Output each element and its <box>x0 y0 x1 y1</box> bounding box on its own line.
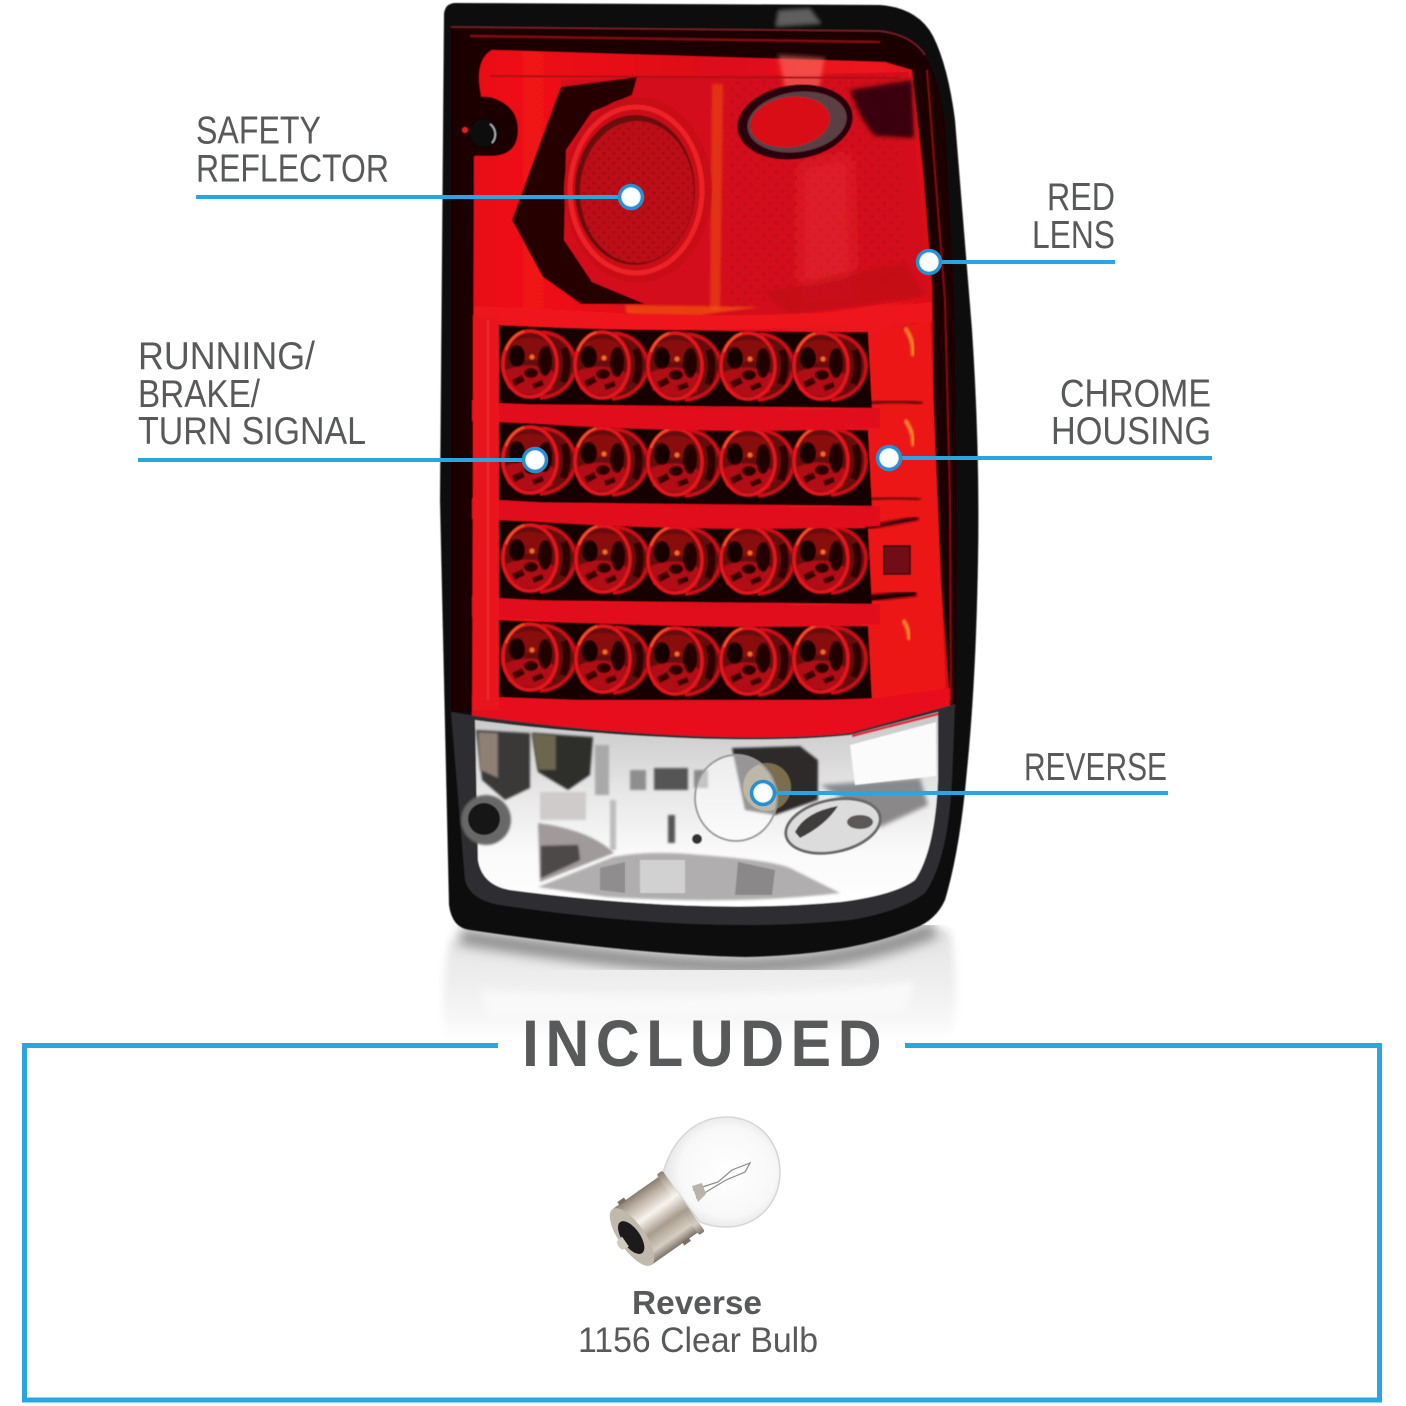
product reflection <box>443 929 956 1040</box>
callout: running brake turn signal: TURN SIGNAL <box>138 410 366 453</box>
side marker square <box>884 546 910 574</box>
red trim line <box>852 714 938 736</box>
callout: red lens <box>918 176 1115 274</box>
tail light assembly <box>440 3 978 957</box>
clear reverse section <box>451 704 955 925</box>
callout: red lens: LENS <box>1032 214 1115 257</box>
lower mounting screw <box>461 795 511 845</box>
panel heading: INCLUDED <box>522 1006 888 1080</box>
centre chrome reflectors <box>540 745 708 850</box>
reverse bulb <box>695 755 777 841</box>
top gloss highlight <box>775 8 822 27</box>
callout: safety reflector: REFLECTOR <box>196 148 389 190</box>
right chrome band <box>820 778 928 827</box>
callout: reverse: REVERSE <box>1024 746 1167 789</box>
callout: chrome housing: HOUSING <box>1051 410 1211 453</box>
upper reflector panel <box>561 72 928 315</box>
red lens <box>462 50 950 740</box>
callout: chrome housing: CHROME <box>1060 372 1211 416</box>
upper oval lens recess <box>732 77 914 167</box>
callout: chrome housing <box>878 372 1212 470</box>
callout: running brake turn signal: BRAKE/ <box>138 373 260 416</box>
reverse bulb socket <box>732 746 818 815</box>
inner dark frame <box>451 27 957 712</box>
chrome oval recess <box>781 791 885 861</box>
LED row backgrounds <box>498 325 872 408</box>
callout: running brake turn signal: RUNNING/ <box>138 335 315 378</box>
dark mask around reflector <box>512 77 645 304</box>
LED bar frame <box>498 320 946 710</box>
bulb caption: Reverse <box>632 1284 762 1321</box>
left chrome dark panel <box>476 730 530 800</box>
callout: reverse <box>752 746 1168 804</box>
right side lens streaks <box>868 320 946 710</box>
red dividers between LED rows <box>472 302 950 740</box>
lower chrome facets <box>538 853 840 900</box>
callout: safety reflector <box>196 110 642 208</box>
corner mounting boss with screw <box>462 96 518 156</box>
callout: red lens: RED <box>1047 176 1115 219</box>
bulb caption: 1156 Clear Bulb <box>578 1321 818 1360</box>
black outer housing <box>440 3 978 957</box>
lower left chrome fold <box>538 823 614 882</box>
callout: running brake turn signal <box>138 335 546 472</box>
panel: included <box>24 1006 1380 1400</box>
safety reflector <box>564 97 712 283</box>
LED row 4 <box>500 623 867 695</box>
icon: 1156 bulb <box>597 1117 780 1277</box>
upper left bulb recess <box>532 733 593 790</box>
LED row 2 <box>500 426 867 496</box>
callout: safety reflector: SAFETY <box>196 110 321 152</box>
panel border <box>24 1046 1380 1400</box>
LED row 3 <box>500 524 867 594</box>
LED row 1 <box>500 330 867 400</box>
bulb caption <box>578 1284 818 1360</box>
